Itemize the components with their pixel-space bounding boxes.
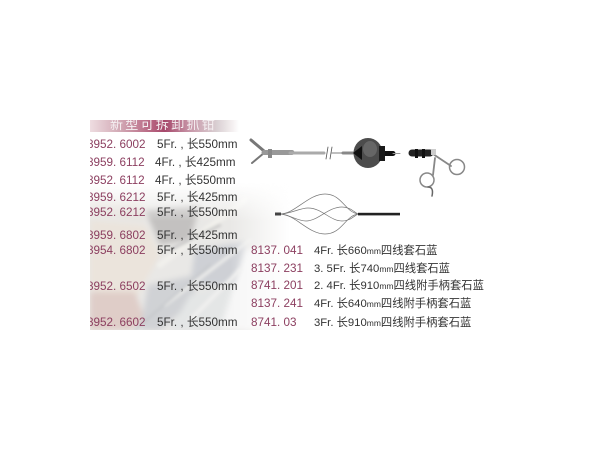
heading banner — [90, 120, 239, 132]
left product list: 5Fr. , 长425mm — [157, 191, 238, 204]
left product list — [90, 138, 238, 329]
background: marble texture — [90, 196, 270, 330]
right product list: 2. 4Fr. 长910mm四线附手柄套石蓝 — [314, 280, 484, 292]
left product list: 5Fr. , 长550mm — [157, 244, 238, 257]
right product list: 8741. 03 — [251, 316, 296, 329]
right product list: 8741. 201 — [251, 279, 303, 292]
left product list: 5Fr. , 长550mm — [157, 138, 238, 151]
icon: detachable grasping forceps — [250, 138, 466, 197]
left product list: 5Fr. , 长550mm — [157, 316, 238, 329]
right product list: 8137. 041 — [251, 244, 303, 257]
icon: four-wire stone basket — [275, 194, 400, 234]
right product list: 3. 5Fr. 长740mm四线套石蓝 — [314, 263, 450, 275]
left product list: 5Fr. , 长425mm — [157, 229, 238, 242]
right product list — [251, 244, 484, 329]
left product list: 5Fr. , 长550mm — [157, 280, 238, 293]
right product list: 4Fr. 长660mm四线套石蓝 — [314, 245, 437, 257]
right product list: 8137. 231 — [251, 262, 303, 275]
right product list: 4Fr. 长640mm四线附手柄套石蓝 — [314, 298, 471, 310]
right product list: 8137. 241 — [251, 297, 303, 310]
right product list: 3Fr. 长910mm四线附手柄套石蓝 — [314, 317, 471, 329]
left product list: 4Fr. , 长425mm — [155, 156, 236, 169]
left product list: 4Fr. , 长550mm — [155, 174, 236, 187]
left product list: 5Fr. , 长550mm — [157, 206, 238, 219]
